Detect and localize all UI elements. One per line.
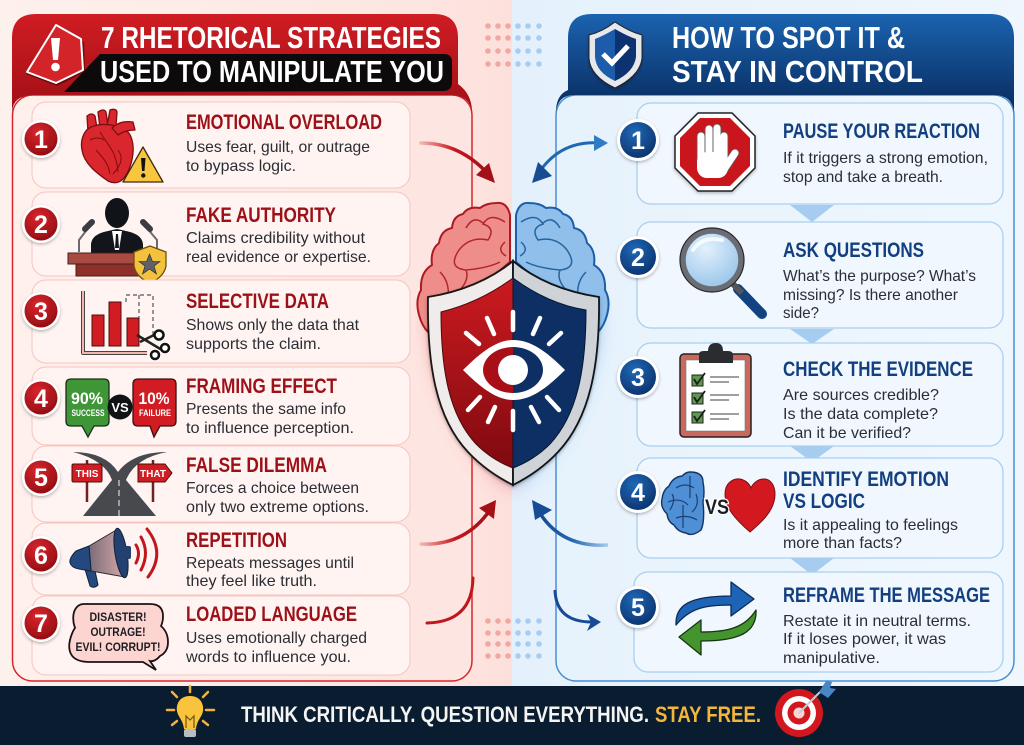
left brain hemisphere xyxy=(417,203,510,332)
number badge 1 xyxy=(22,120,60,158)
right header title: HOW TO SPOT IT & xyxy=(672,20,905,55)
strategy card 1 xyxy=(22,102,410,188)
chevron connectors between steps xyxy=(790,205,834,575)
card 5 heading: FALSE DILEMMA xyxy=(186,454,327,477)
left header black band xyxy=(64,54,452,92)
shield face red half xyxy=(441,278,513,468)
step number 5: 5 xyxy=(631,594,645,622)
icon: megaphone xyxy=(70,527,157,587)
card 7 text xyxy=(185,630,367,666)
card 2 text: Claims credibility without xyxy=(186,230,366,247)
icon: 90% versus 10% speech bubbles: VS xyxy=(111,400,129,415)
step 1 text: If it triggers a strong emotion, xyxy=(783,150,988,167)
card 7 text: words to influence you. xyxy=(185,649,351,666)
card 1 text: Uses fear, guilt, or outrage xyxy=(186,139,370,156)
icon: loaded words speech bubble xyxy=(69,604,168,670)
eye icon xyxy=(463,340,565,400)
arrow: emotional overload into shield xyxy=(421,143,495,183)
step card 2 xyxy=(617,222,1003,328)
number badge 4 xyxy=(22,379,60,417)
panel: manipulation strategies xyxy=(12,14,472,681)
step card 4 xyxy=(617,458,1003,558)
icon: magnifying glass xyxy=(680,228,762,314)
arrow: repetition into shield xyxy=(421,500,496,544)
card 1 text xyxy=(186,139,370,175)
background: right half xyxy=(512,0,1024,745)
icon: loaded words speech bubble: EVIL! CORRUPT! xyxy=(76,640,160,654)
decorative dots: bottom left xyxy=(485,618,511,659)
panel: spot it and stay in control xyxy=(556,14,1014,681)
number badge 2 xyxy=(22,205,60,243)
icon: clipboard checklist xyxy=(680,343,751,437)
step number 1 xyxy=(617,119,659,161)
left header title: 7 RHETORICAL STRATEGIES xyxy=(101,20,441,55)
icon: 90% versus 10% speech bubbles: SUCCESS xyxy=(72,408,104,418)
card 3 text xyxy=(186,317,360,353)
card 4 text: Presents the same info xyxy=(186,401,346,418)
step 4 heading: VS LOGIC xyxy=(783,490,865,513)
background: left half xyxy=(0,0,512,745)
icon: alert badge xyxy=(26,25,85,86)
icon: forked road with signs xyxy=(72,452,172,516)
strategy card 3 xyxy=(22,280,410,363)
number badge 7 xyxy=(22,604,60,642)
card 3 heading: SELECTIVE DATA xyxy=(186,290,329,313)
step number 5 xyxy=(617,586,659,628)
icon: target with arrow xyxy=(775,681,836,737)
icon: 90% versus 10% speech bubbles: FAILURE xyxy=(139,408,171,418)
icon: 90% versus 10% speech bubbles xyxy=(66,379,176,437)
card 6 text: they feel like truth. xyxy=(186,573,317,590)
step 5 text: If it loses power, it was xyxy=(783,631,946,648)
icon: cropped bar chart with scissors xyxy=(83,291,169,359)
number badge 5: 5 xyxy=(34,464,48,492)
decorative dots: top right xyxy=(515,23,542,67)
icon: shield with check xyxy=(589,22,642,88)
strategy card 6 xyxy=(22,523,410,595)
step number 3 xyxy=(617,356,659,398)
arrow: loaded language connector xyxy=(427,578,473,623)
decorative dots: top left xyxy=(485,23,511,67)
step 5 text: manipulative. xyxy=(783,650,880,667)
step 4 heading xyxy=(783,468,949,513)
number badge 1: 1 xyxy=(34,126,48,154)
step 2 text: side? xyxy=(783,305,819,322)
step 5 text xyxy=(783,613,971,667)
step 4 heading: IDENTIFY EMOTION xyxy=(783,468,949,491)
strategy card 2 xyxy=(22,192,410,283)
arrow: identify emotion into shield xyxy=(532,500,608,545)
card 4 text xyxy=(186,401,354,437)
card 4 text: to influence perception. xyxy=(186,420,354,437)
card 7 heading: LOADED LANGUAGE xyxy=(186,603,357,626)
icon: reframing arrows xyxy=(676,582,756,655)
icon: heart with warning xyxy=(82,109,163,183)
card 3 text: supports the claim. xyxy=(186,336,321,353)
shield face navy half xyxy=(513,278,586,468)
step 5 text: Restate it in neutral terms. xyxy=(783,613,971,630)
icon: forked road with signs: THIS xyxy=(76,469,99,480)
number badge 7: 7 xyxy=(34,610,48,638)
icon: loaded words speech bubble: DISASTER! xyxy=(90,610,146,624)
step number 4: 4 xyxy=(631,479,645,507)
step 3 text: Is the data complete? xyxy=(783,406,938,423)
decorative dots: bottom right xyxy=(515,618,542,659)
step number 4 xyxy=(617,471,659,513)
arrow: pause reaction two-way xyxy=(532,135,608,183)
footer slogan: THINK CRITICALLY. QUESTION EVERYTHING. xyxy=(241,702,649,727)
card 6 text xyxy=(186,555,354,590)
number badge 3 xyxy=(22,292,60,330)
icon: brain versus heart xyxy=(662,472,775,534)
icon: light bulb xyxy=(167,686,214,737)
step 2 text: What’s the purpose? What’s xyxy=(783,268,976,285)
card 1 heading: EMOTIONAL OVERLOAD xyxy=(186,111,382,134)
step 4 text xyxy=(783,517,958,552)
step number 2 xyxy=(617,236,659,278)
icon: stop sign with hand xyxy=(675,113,755,191)
step 2 text xyxy=(783,268,976,322)
card 7 text: Uses emotionally charged xyxy=(186,630,367,647)
central emblem: brain and shield xyxy=(417,203,609,490)
left header banner xyxy=(12,14,472,112)
icon: forked road with signs: THAT xyxy=(140,469,166,480)
number badge 4: 4 xyxy=(34,385,48,413)
card 3 text: Shows only the data that xyxy=(186,317,360,334)
card 2 text xyxy=(186,230,371,266)
icon: speaker at podium with shield xyxy=(68,198,166,283)
eye rays xyxy=(466,312,561,430)
card 5 text: Forces a choice between xyxy=(186,480,359,497)
footer banner xyxy=(0,681,1024,745)
number badge 2: 2 xyxy=(34,211,48,239)
card 6 text: Repeats messages until xyxy=(186,555,354,572)
icon: loaded words speech bubble: OUTRAGE! xyxy=(90,625,146,639)
step number 2: 2 xyxy=(631,244,645,272)
step 2 text: missing? Is there another xyxy=(783,287,959,304)
card 6 heading: REPETITION xyxy=(186,529,287,552)
card 4 heading: FRAMING EFFECT xyxy=(186,375,337,398)
step card 1 xyxy=(617,103,1003,204)
step 3 text: Are sources credible? xyxy=(783,387,939,404)
raised hand xyxy=(697,128,735,178)
number badge 3: 3 xyxy=(34,298,48,326)
step 3 text xyxy=(783,387,939,442)
step card 3 xyxy=(617,343,1003,446)
card 2 text: real evidence or expertise. xyxy=(186,249,371,266)
step 2 heading: ASK QUESTIONS xyxy=(783,239,924,262)
card 5 text: only two extreme options. xyxy=(186,499,369,516)
left header title xyxy=(100,20,444,89)
number badge 5 xyxy=(22,458,60,496)
card 2 heading: FAKE AUTHORITY xyxy=(186,204,336,227)
card 1 text: to bypass logic. xyxy=(186,158,296,175)
step number 3: 3 xyxy=(631,364,645,392)
strategy card 5 xyxy=(22,446,410,522)
step 4 text: Is it appealing to feelings xyxy=(783,517,958,534)
right header title xyxy=(672,20,923,89)
card 5 text xyxy=(186,480,369,516)
footer slogan highlight: STAY FREE. xyxy=(655,702,761,727)
icon: 90% versus 10% speech bubbles: 90% xyxy=(71,389,103,408)
strategy card 7 xyxy=(22,596,410,675)
step 1 text: stop and take a breath. xyxy=(783,169,943,186)
step card 5 xyxy=(617,572,1003,672)
shield frame xyxy=(428,261,599,485)
icon: brain versus heart: VS xyxy=(705,496,729,519)
step 3 text: Can it be verified? xyxy=(783,425,911,442)
step 4 text: more than facts? xyxy=(783,535,902,552)
right brain hemisphere xyxy=(516,203,609,332)
right header title: STAY IN CONTROL xyxy=(672,54,923,89)
glow behind shield xyxy=(428,280,600,490)
right panel body xyxy=(556,95,1014,681)
strategy card 4 xyxy=(22,367,410,445)
left panel body xyxy=(12,95,472,681)
step number 1: 1 xyxy=(631,127,645,155)
step 1 text xyxy=(783,150,988,186)
step 3 heading: CHECK THE EVIDENCE xyxy=(783,358,973,381)
right header banner xyxy=(556,14,1014,112)
icon: 90% versus 10% speech bubbles: 10% xyxy=(138,389,170,408)
number badge 6: 6 xyxy=(34,542,48,570)
arrow: panel edge to reframe step xyxy=(555,590,601,631)
number badge 6 xyxy=(22,536,60,574)
left header title: USED TO MANIPULATE YOU xyxy=(100,54,444,89)
